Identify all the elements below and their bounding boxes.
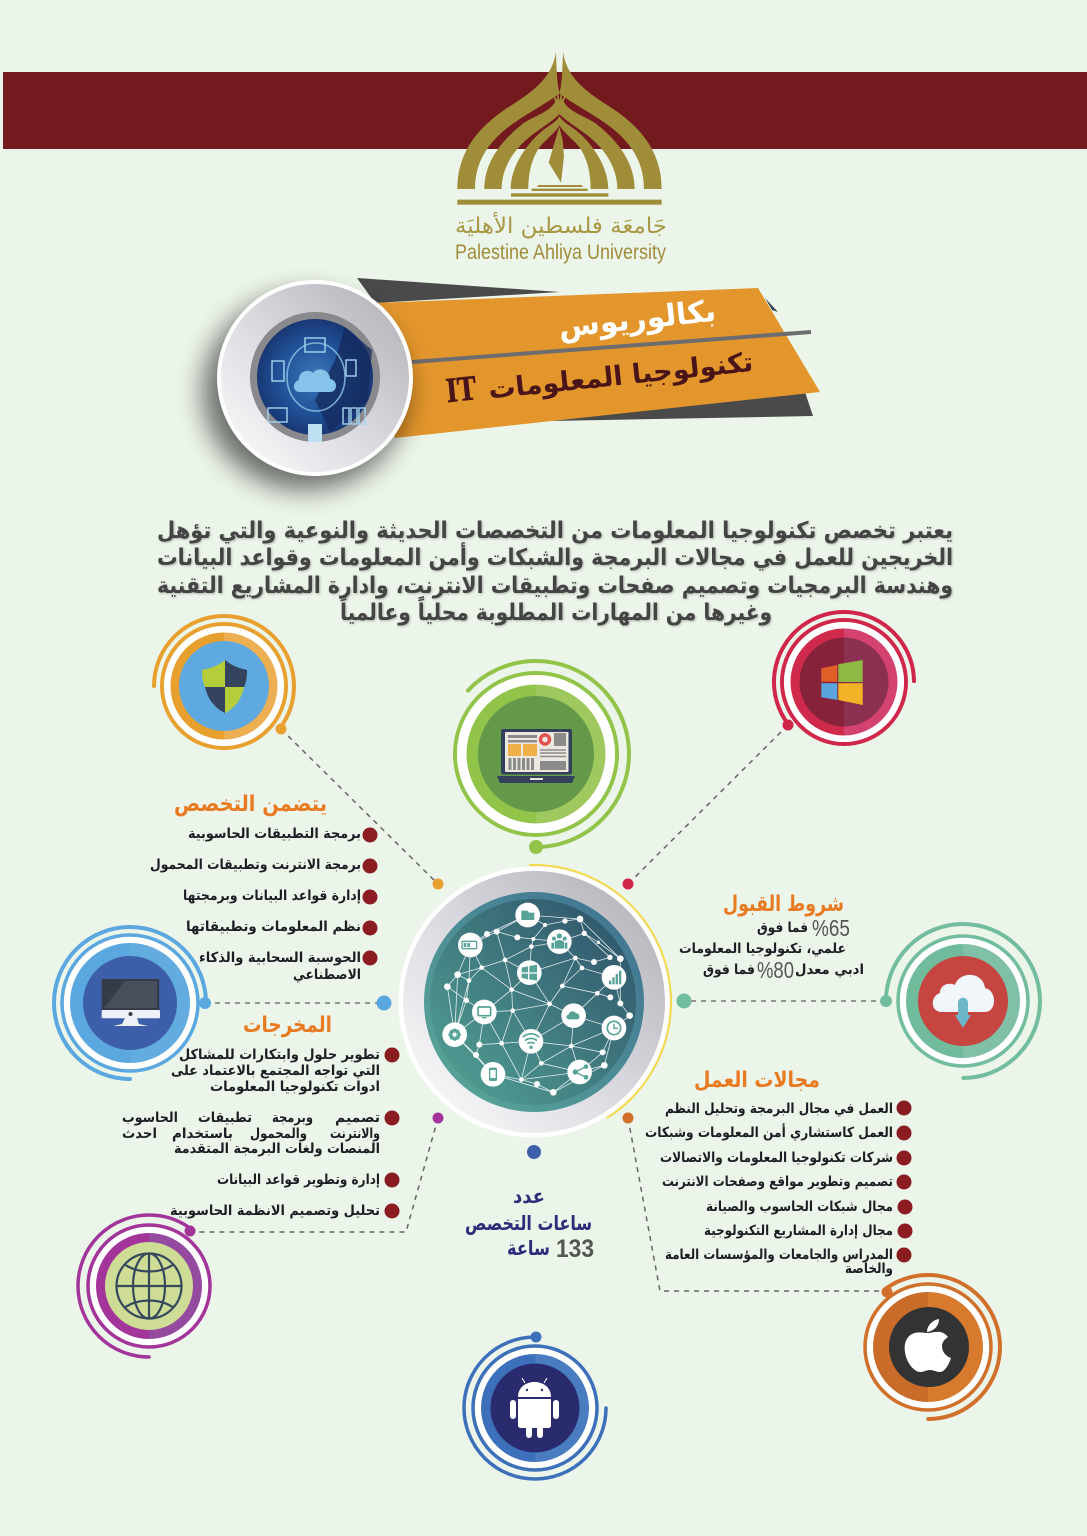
admission requirements text — [679, 915, 864, 983]
heading: specialization includes: يتضمن التخصص — [174, 792, 327, 817]
list: outcomes: تحليل وتصميم الانظمة الحاسوبية — [170, 1203, 380, 1219]
admission requirements text: فما فوق — [703, 962, 755, 978]
intro paragraph: الخريجين للعمل في مجالات البرمجة والشبكات وأمن المعلومات وقواعد البيانات — [157, 541, 953, 571]
list: specialization topics: الحوسبة السحابية والذكاء — [199, 950, 361, 966]
list: fields of work: المدراس والجامعات والمؤسسات العامة — [665, 1247, 893, 1263]
list: outcomes: تصميم — [335, 1110, 380, 1126]
icon: apple — [827, 1246, 1029, 1448]
list: outcomes: إدارة وتطوير قواعد البيانات — [217, 1172, 380, 1188]
intro paragraph: وهندسة البرمجيات وتصميم صفحات وتطبيقات الانترنت، وادارة المشاريع التقنية — [157, 573, 953, 599]
university logo — [455, 52, 667, 264]
banner heading: degree: بكالوريوس — [557, 294, 718, 345]
hub connector dots — [376, 878, 692, 1159]
credit hours block — [465, 1184, 594, 1263]
list: specialization topics: نظم المعلومات وتطبيقاتها — [186, 919, 361, 935]
intro paragraph — [157, 518, 953, 626]
credit hours block: ساعة — [507, 1236, 550, 1260]
icon: android — [464, 1332, 606, 1479]
admission requirements text: %80 — [757, 957, 794, 983]
icon: globe — [78, 1215, 220, 1357]
heading: fields of work: مجالات العمل — [694, 1068, 820, 1093]
list: fields of work — [645, 1100, 912, 1277]
heading: admission requirements: شروط القبول — [723, 892, 844, 917]
credit hours block: ساعات التخصص — [465, 1211, 592, 1235]
list: specialization topics: إدارة قواعد البيانات وبرمجتها — [183, 888, 361, 904]
university logo: جَامعَة فلسطين الأهليَة — [455, 212, 667, 239]
credit hours block: عدد — [513, 1184, 545, 1208]
title banner — [357, 278, 820, 438]
connector: windows to hub — [628, 725, 788, 884]
list: outcomes: والانترنت — [330, 1126, 380, 1142]
credit hours block: 133 — [556, 1235, 594, 1263]
list: specialization topics: برمجة الانترنت وتطبيقات المحمول — [150, 857, 361, 873]
list: outcomes: الحاسوب — [122, 1110, 178, 1126]
network mesh — [442, 903, 633, 1096]
connector: shield to hub — [281, 729, 438, 884]
connector: apple to hub — [628, 1118, 887, 1291]
list: outcomes: احدث — [122, 1126, 157, 1142]
admission requirements text: ادبي معدل — [795, 962, 864, 978]
banner heading: major: IT — [444, 368, 478, 410]
list: outcomes: تطوير حلول وابتكارات للمشاكل — [179, 1047, 380, 1063]
list: outcomes: التي تواجه المجتمع بالاعتماد على — [171, 1063, 380, 1079]
connector: monitor to hub — [205, 1002, 384, 1004]
list: outcomes: ادوات تكنولوجيا المعلومات — [210, 1079, 380, 1095]
connector: globe to hub — [190, 1118, 438, 1232]
heading: outcomes: المخرجات — [243, 1013, 332, 1038]
list: fields of work: تصميم وتطوير مواقع وصفحات الانترنت — [662, 1174, 893, 1190]
icon: shield — [154, 616, 294, 756]
icon: laptop — [405, 623, 667, 885]
list: specialization topics — [150, 826, 378, 983]
admission requirements text: %65 — [812, 915, 850, 941]
list: outcomes: تطبيقات — [198, 1110, 252, 1126]
icon: cloud download — [880, 924, 1040, 1078]
circular plate with cloud image — [203, 280, 413, 490]
list: fields of work: العمل كاستشاري أمن المعلومات وشبكات — [645, 1123, 893, 1142]
hub mini icons — [448, 911, 621, 1081]
list: fields of work: شركات تكنولوجيا المعلومات والاتصالات — [660, 1150, 893, 1166]
admission requirements text: فما فوق — [757, 920, 808, 936]
list: outcomes — [122, 1047, 400, 1219]
list: outcomes: والمحمول — [250, 1126, 307, 1142]
list: outcomes: المنصات ولغات البرمجة المتقدمة — [174, 1141, 380, 1157]
list: specialization topics: الاصطناعي — [293, 967, 361, 983]
admission requirements text: علمي، تكنولوجيا المعلومات — [679, 941, 846, 957]
list: outcomes: باستخدام — [172, 1126, 233, 1142]
list: fields of work: والخاصة — [845, 1261, 893, 1277]
list: outcomes: وبرمجة — [272, 1110, 313, 1126]
connector: cloud to hub — [684, 1000, 886, 1002]
list: fields of work: مجال شبكات الحاسوب والصيانة — [706, 1199, 893, 1215]
central network hub — [392, 860, 676, 1144]
list: specialization topics: برمجة التطبيقات الحاسوبية — [188, 826, 361, 842]
banner heading: major: تكنولوجيا المعلومات — [487, 347, 755, 406]
intro paragraph: وغيرها من المهارات المطلوبة محلياً وعالمياً — [340, 596, 772, 626]
header band — [3, 72, 1087, 149]
intro paragraph: يعتبر تخصص تكنولوجيا المعلومات من التخصصات الحديثة والنوعية والتي تؤهل — [157, 518, 953, 544]
icon: desktop monitor — [54, 927, 211, 1079]
list: fields of work: العمل في مجال البرمجة وتحليل النظم — [665, 1101, 893, 1117]
university logo: Palestine Ahliya University — [455, 241, 666, 264]
icon: windows — [746, 584, 942, 780]
list: fields of work: مجال إدارة المشاريع التكنولوجية — [704, 1223, 893, 1239]
